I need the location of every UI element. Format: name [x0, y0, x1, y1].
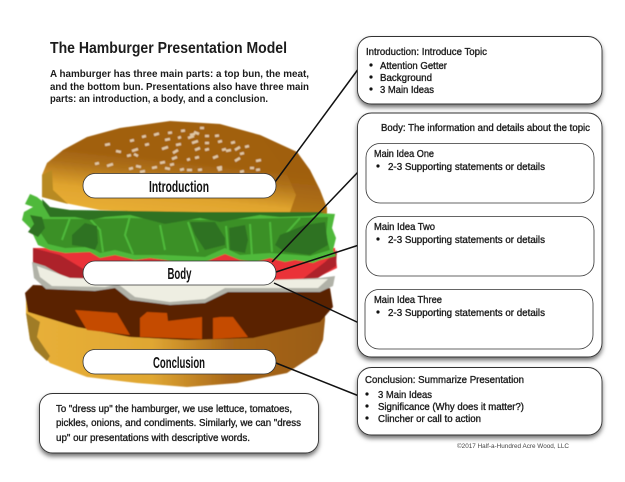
bottom bun [26, 300, 325, 387]
sub-panel: main idea one: 2-3 Supporting statements or details [388, 162, 545, 173]
lettuce mid-green base [40, 217, 330, 257]
sub-panel: main idea two: 2-3 Supporting statements or details [388, 235, 545, 246]
onion slices [32, 262, 335, 305]
sub-panel: main idea two: Main Idea Two [374, 222, 435, 233]
intro paragraph: and the bottom bun. Presentations also have three main [50, 81, 309, 93]
top bun [42, 121, 327, 214]
panel: conclusion: Clincher or call to action [378, 414, 481, 425]
lettuce veins [62, 216, 300, 256]
meat highlights [75, 310, 248, 339]
connector lines [272, 68, 359, 396]
callout: dress up: To "dress up" the hamburger, we use lettuce, tomatoes, [56, 404, 292, 415]
hamburger illustration [22, 121, 337, 387]
sub-panel: main idea three: 2-3 Supporting statements or details [388, 308, 545, 319]
panel: introduction: Attention Getter [380, 61, 448, 72]
panel: body: Body: The information and details about the topic [381, 123, 590, 134]
lettuce dark leaves [28, 215, 328, 255]
label: Introduction [83, 174, 276, 198]
panel: conclusion: 3 Main Ideas [378, 390, 432, 401]
callout: dress up: up" our presentations with descriptive words. [56, 433, 250, 444]
bottom bun left shade [26, 313, 50, 361]
top bun left shade [42, 170, 68, 204]
lettuce [22, 194, 336, 263]
meat patty [25, 285, 333, 340]
sub-panel: main idea three: Main Idea Three [374, 295, 442, 306]
callout: dress up [40, 394, 318, 453]
panel: body [358, 113, 602, 357]
intro paragraph: parts: an introduction, a body, and a conclusion. [50, 93, 268, 105]
label: Body: Body [168, 266, 192, 283]
panel: introduction: Background [380, 73, 432, 84]
panel: conclusion: Significance (Why does it matter?) [378, 402, 524, 413]
tomato [33, 248, 337, 283]
lettuce dark band [42, 199, 325, 224]
callout: dress up: pickles, onions, and condiments. Similarly, we can "dress [56, 418, 301, 429]
panel: conclusion: Conclusion: Summarize Presentation [365, 375, 524, 386]
label: Body [83, 261, 276, 285]
tomato shade [33, 248, 337, 281]
panel: conclusion [358, 368, 602, 435]
sub-panel: main idea one [366, 144, 594, 203]
panel: introduction [358, 36, 602, 104]
intro paragraph [50, 68, 309, 105]
copyright: ©2017 Half-a-Hundred Acre Wood, LLC [457, 442, 569, 450]
label: Introduction: Introduction [149, 179, 209, 196]
sesame seeds [95, 128, 261, 172]
panel: introduction: 3 Main Ideas [380, 85, 434, 96]
label: Conclusion [83, 350, 276, 374]
panel: introduction: Introduction: Introduce Topic [366, 47, 487, 58]
sub-panel: main idea three [365, 290, 593, 349]
top bun right shade [260, 135, 327, 214]
title: The Hamburger Presentation Model [50, 40, 287, 57]
sub-panel: main idea one: Main Idea One [374, 149, 434, 160]
label: Conclusion: Conclusion [153, 355, 205, 372]
intro paragraph: A hamburger has three main parts: a top bun, the meat, [50, 68, 309, 80]
sub-panel: main idea two [366, 216, 594, 276]
